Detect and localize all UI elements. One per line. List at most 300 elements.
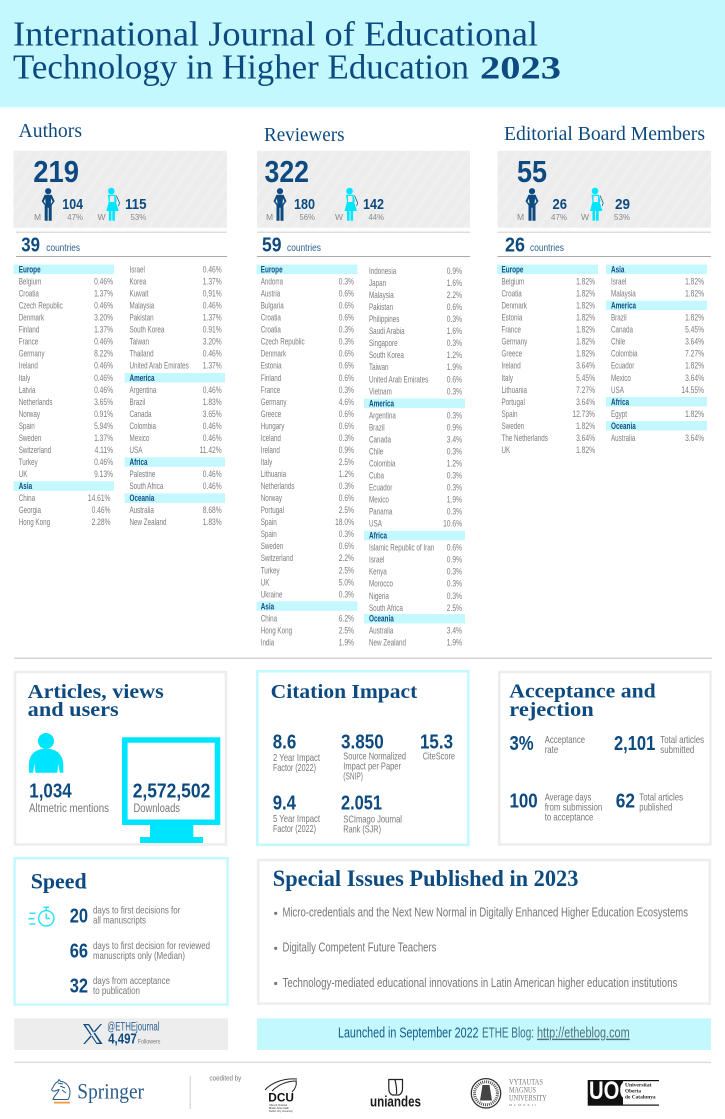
panel: acceptance and rejection: to acceptance (545, 811, 593, 823)
table: editorial board by country: Portugal (502, 397, 525, 407)
panel: citation impact: 2.051 (341, 793, 382, 815)
panel: acceptance and rejection: Acceptance (545, 734, 585, 746)
table: authors by country (14, 264, 225, 527)
table: reviewers by country: 0.6% (339, 409, 354, 419)
panel: citation impact: 5 Year Impact (273, 813, 320, 825)
table: reviewers by country: Morocco (369, 579, 393, 589)
table: authors by country: 0.46% (94, 361, 113, 371)
table: editorial board by country: 1.82% (685, 277, 704, 287)
table: editorial board by country: Brazil (611, 313, 627, 323)
table: reviewers by country: Estonia (261, 361, 282, 371)
table: reviewers by country: Africa (369, 530, 387, 541)
table: editorial board by country: Colombia (611, 349, 638, 359)
panel: X account (14, 1018, 228, 1050)
heading: Reviewers: Reviewers (264, 125, 344, 146)
table: reviewers by country: Asia (261, 601, 275, 612)
table: reviewers by country: UK (261, 577, 269, 588)
logo: Springer: Springer (77, 1078, 145, 1103)
table: authors by country: South Korea (130, 325, 165, 335)
table: authors by country: Norway (19, 409, 40, 419)
panel: acceptance and rejection: submitted (660, 744, 694, 756)
panel: authors totals: 104 (62, 197, 83, 213)
table: editorial board by country: Estonia (502, 313, 523, 323)
table: editorial board by country: 3.64% (685, 373, 704, 383)
table: authors by country: 1.37% (203, 361, 222, 371)
panel: speed: Speed (31, 868, 87, 893)
table: reviewers by country: Croatia (261, 313, 282, 323)
table: reviewers by country: 1.9% (447, 362, 462, 372)
table: editorial board by country: Israel (611, 276, 627, 287)
logo: UOC: Oberta (625, 1088, 641, 1094)
table: reviewers by country: 5.0% (339, 577, 354, 588)
panel: editorial board totals: 47% (551, 212, 567, 222)
panel: citation impact: CiteScore (423, 750, 455, 762)
table: editorial board by country: Spain (502, 409, 518, 419)
panel: editorial board totals: M (517, 212, 524, 222)
title banner: 2023 (480, 50, 561, 86)
table: authors by country: 1.37% (203, 277, 222, 287)
table: editorial board by country: Oceania (611, 421, 636, 431)
reviewers country count (262, 234, 321, 256)
table: reviewers by country: Spain (261, 529, 277, 540)
panel: reviewers totals: 142 (363, 197, 384, 213)
logo: uniandes (370, 1080, 421, 1111)
logo: UOC: de Catalunya (625, 1094, 656, 1100)
icon: woman (590, 188, 603, 221)
table: editorial board by country: 1.82% (576, 445, 595, 455)
authors country count: countries (46, 242, 80, 254)
table: authors by country: 11.42% (200, 445, 222, 455)
table: authors by country: UK (19, 469, 27, 479)
panel: speed: 66 (70, 941, 88, 963)
table: reviewers by country: Denmark (261, 349, 286, 359)
table: editorial board by country: 1.82% (576, 325, 595, 335)
table: reviewers by country: 0.3% (339, 385, 354, 395)
table: authors by country: Hong Kong (19, 517, 50, 527)
table: reviewers by country: 1.6% (447, 326, 462, 336)
table: reviewers by country: Israel (369, 555, 385, 565)
table: reviewers by country: South Africa (369, 603, 403, 613)
table: editorial board by country: Greece (502, 349, 522, 359)
table: authors by country: New Zealand (130, 517, 166, 527)
table: authors by country: Kuwait (130, 289, 149, 299)
table: editorial board by country: 1.82% (576, 277, 595, 287)
table: reviewers by country: China (261, 613, 278, 624)
table: reviewers by country: Kenya (369, 567, 387, 577)
logo: DCU: Ollscoil Chathair (269, 1104, 287, 1107)
panel: citation impact: Rank (SJR) (343, 824, 381, 836)
table: authors by country: 0.46% (203, 265, 222, 275)
table: reviewers by country: Colombia (369, 458, 396, 469)
table: authors by country: 0.46% (94, 457, 113, 467)
title banner: Technology in Higher Education (13, 48, 469, 86)
icon: stopwatch (28, 907, 54, 926)
panel: speed: days to first decision for reviewed (93, 940, 210, 952)
table: reviewers by country: 0.3% (447, 314, 462, 324)
table: editorial board by country: Italy (502, 373, 513, 383)
table: reviewers by country: 0.6% (339, 313, 354, 323)
panel: blog banner: Launched in September 2022 (338, 1026, 478, 1042)
table: authors by country: Israel (130, 264, 145, 275)
table: reviewers by country: Saudi Arabia (369, 326, 405, 337)
panel: speed: 20 (70, 905, 88, 927)
table: reviewers by country: Cuba (369, 470, 385, 481)
table: authors by country: 0.46% (203, 469, 222, 479)
table: reviewers by country: 4.6% (339, 397, 354, 407)
table: reviewers by country: Taiwan (369, 362, 389, 373)
table: editorial board by country: 1.82% (685, 313, 704, 323)
table: reviewers by country: 2.5% (447, 603, 462, 613)
table: reviewers by country: Singapore (369, 338, 398, 349)
table: reviewers by country: 0.9% (447, 266, 462, 276)
table: authors by country: 9.13% (94, 469, 113, 479)
panel: acceptance and rejection: rejection (509, 699, 594, 721)
table: reviewers by country: 2.5% (339, 565, 354, 576)
panel: X account: @ETHEjournal (107, 1021, 160, 1033)
table: reviewers by country: 0.3% (447, 483, 462, 493)
table: editorial board by country: 14.55% (681, 385, 704, 395)
table: editorial board by country: 3.64% (576, 397, 595, 407)
panel: reviewers totals: 56% (300, 212, 315, 222)
table: editorial board by country: Ecuador (611, 361, 635, 371)
table: editorial board by country: 1.82% (576, 421, 595, 431)
panel: articles, views and users: Articles, views (28, 681, 164, 703)
table: reviewers by country: 0.3% (339, 277, 354, 287)
table: reviewers by country: 0.3% (339, 481, 354, 491)
table: authors by country: Ireland (19, 361, 38, 371)
panel: editorial board totals: 29 (615, 197, 630, 213)
table: editorial board by country: Australia (611, 433, 636, 443)
table: authors by country: Turkey (19, 457, 38, 467)
table: editorial board by country: 12.73% (572, 409, 595, 419)
table: authors by country: Sweden (19, 433, 41, 443)
reviewers country count: 59 (262, 234, 282, 256)
table: editorial board by country: Africa (611, 397, 629, 407)
table: authors by country: Korea (130, 276, 147, 287)
table: reviewers by country: 1.9% (447, 495, 462, 505)
table: reviewers by country (256, 264, 465, 648)
table: reviewers by country: 0.6% (339, 301, 354, 311)
table: reviewers by country: Islamic Republic of Iran (369, 543, 434, 553)
table: reviewers by country: 0.3% (447, 411, 462, 421)
table: editorial board by country: 3.64% (576, 361, 595, 371)
table: reviewers by country: 0.6% (339, 493, 354, 503)
table: reviewers by country: Pakistan (369, 302, 393, 312)
table: editorial board by country: Malaysia (611, 289, 636, 299)
table: reviewers by country: Oceania (369, 613, 394, 624)
table: authors by country: Belgium (19, 276, 41, 287)
table: reviewers by country: Sweden (261, 541, 283, 552)
table: reviewers by country: 0.3% (447, 471, 462, 481)
table: editorial board by country: Mexico (611, 373, 631, 383)
table: authors by country: 5.94% (94, 421, 113, 431)
table: reviewers by country: 0.3% (447, 338, 462, 348)
table: authors by country: 0.46% (203, 433, 222, 443)
title banner (0, 0, 725, 108)
icon: person (29, 733, 63, 773)
table: authors by country: Czech Republic (19, 301, 63, 311)
panel: articles, views and users: Downloads (134, 803, 180, 815)
table: reviewers by country: 3.4% (447, 435, 462, 445)
table: authors by country: Pakistan (130, 313, 154, 323)
table: authors by country: 0.46% (94, 277, 113, 287)
table: editorial board by country: France (502, 325, 521, 335)
table: authors by country: 8.68% (203, 505, 222, 515)
table: reviewers by country: 0.9% (447, 423, 462, 433)
table: reviewers by country: Spain (261, 517, 277, 527)
icon: monitor (122, 737, 220, 843)
table: editorial board by country: 3.64% (685, 337, 704, 347)
table: authors by country: 1.83% (203, 397, 222, 407)
table: editorial board by country: 5.45% (576, 373, 595, 383)
table: reviewers by country: Hong Kong (261, 625, 292, 636)
table: authors by country: Netherlands (19, 397, 53, 407)
logo: DCU (265, 1079, 297, 1113)
panel: authors totals (14, 151, 227, 228)
table: reviewers by country: USA (369, 519, 383, 529)
table: authors by country: Europe (19, 264, 41, 275)
table: reviewers by country: 0.3% (447, 567, 462, 577)
panel: citation impact (257, 671, 468, 845)
table: authors by country: 0.46% (203, 421, 222, 431)
panel: authors totals: 53% (130, 212, 147, 222)
table: authors by country: 3.20% (94, 313, 113, 323)
panel: reviewers totals: M (266, 212, 273, 222)
table: authors by country: 0.46% (94, 301, 113, 311)
table: reviewers by country: 2.2% (339, 553, 354, 563)
heading: Authors: Authors (18, 121, 82, 142)
table: authors by country: 0.46% (203, 301, 222, 311)
table: editorial board by country: 5.45% (685, 325, 704, 335)
table: reviewers by country: 2.2% (447, 290, 462, 300)
table: reviewers by country: Ireland (261, 445, 280, 455)
table: reviewers by country: Australia (369, 626, 394, 636)
table: authors by country: Thailand (130, 349, 154, 359)
table: reviewers by country: 0.3% (339, 325, 354, 335)
logo: Vytautas Magnus University: VYTAUTAS (509, 1076, 543, 1086)
panel: speed (15, 858, 228, 1004)
table: editorial board by country: USA (611, 385, 625, 395)
table: editorial board by country: 1.82% (576, 313, 595, 323)
table: reviewers by country: 18.0% (335, 517, 354, 527)
panel: citation impact: 2 Year Impact (273, 752, 320, 764)
table: authors by country: South Africa (130, 481, 164, 491)
table: authors by country: 8.22% (94, 349, 113, 359)
panel: authors totals: W (98, 212, 106, 222)
table: authors by country: 1.37% (94, 325, 113, 335)
table: editorial board by country: Canada (611, 325, 634, 335)
panel: acceptance and rejection: Total articles (660, 734, 704, 746)
table: authors by country: 3.65% (203, 409, 222, 419)
table: editorial board by country: Europe (502, 264, 524, 275)
table: authors by country: 1.37% (94, 289, 113, 299)
table: editorial board by country: Denmark (502, 301, 527, 311)
table: reviewers by country: 0.9% (447, 555, 462, 565)
table: editorial board by country: 1.82% (576, 337, 595, 347)
table: authors by country: Georgia (19, 505, 42, 515)
table: authors by country: China (19, 493, 36, 503)
table: authors by country: Australia (130, 505, 155, 515)
panel: editorial board totals: W (581, 212, 589, 222)
table: reviewers by country: 0.3% (447, 579, 462, 589)
table: authors by country: 0.46% (94, 385, 113, 395)
table: reviewers by country: Norway (261, 493, 282, 503)
table: reviewers by country: Brazil (369, 422, 385, 433)
editorial board country count: countries (530, 242, 564, 254)
table: authors by country: Italy (19, 373, 30, 383)
heading: Editorial Board Members: Editorial Board Members (504, 124, 705, 145)
table: reviewers by country: 1.6% (447, 278, 462, 288)
table: reviewers by country: 0.3% (447, 447, 462, 457)
table: reviewers by country: Malaysia (369, 290, 394, 300)
panel: acceptance and rejection: 62 (616, 791, 635, 813)
panel: citation impact: 8.6 (273, 731, 296, 753)
table: reviewers by country: United Arab Emirates (369, 374, 428, 385)
table: editorial board by country: 1.82% (685, 289, 704, 299)
panel: acceptance and rejection: 2,101 (614, 733, 655, 755)
table: authors by country: United Arab Emirates (130, 361, 189, 371)
icon: man (274, 188, 286, 221)
panel: articles, views and users: 1,034 (29, 781, 72, 803)
table: authors by country: Africa (130, 457, 148, 467)
logo: Vytautas Magnus University (471, 1076, 547, 1108)
table: reviewers by country: 10.6% (443, 519, 462, 529)
table: reviewers by country: America (369, 398, 394, 409)
table: editorial board by country: Ireland (502, 361, 521, 371)
panel: acceptance and rejection: Total articles (639, 791, 683, 803)
panel: citation impact: 15.3 (420, 731, 453, 753)
table: reviewers by country: 0.3% (447, 507, 462, 517)
table: reviewers by country: 0.3% (339, 433, 354, 443)
table: editorial board by country: 3.64% (685, 433, 704, 443)
table: reviewers by country: 0.6% (447, 374, 462, 385)
table: reviewers by country: 2.5% (339, 626, 354, 636)
panel: acceptance and rejection: 100 (510, 791, 538, 813)
table: editorial board by country: Belgium (502, 276, 524, 287)
table: reviewers by country: 0.6% (339, 349, 354, 359)
table: reviewers by country: 1.2% (339, 469, 354, 479)
table: reviewers by country: 0.6% (339, 361, 354, 371)
logo: Vytautas Magnus University: MCMXXII (509, 1103, 537, 1107)
table: reviewers by country: 1.9% (339, 638, 354, 648)
table: reviewers by country: Vietnam (369, 386, 392, 397)
table: editorial board by country: Germany (502, 337, 527, 347)
panel: speed: 32 (70, 975, 88, 997)
table: reviewers by country: Netherlands (261, 481, 295, 491)
panel: citation impact: Factor (2022) (273, 762, 316, 774)
table: authors by country: 0.91% (203, 325, 222, 335)
table: reviewers by country: 2.5% (339, 457, 354, 467)
table: authors by country: 1.37% (94, 433, 113, 443)
table: reviewers by country: 0.6% (447, 302, 462, 312)
panel: citation impact: Impact per Paper (343, 760, 401, 772)
table: authors by country: 3.20% (203, 337, 222, 347)
table: authors by country: Croatia (19, 289, 40, 299)
table: authors by country: 0.91% (94, 409, 113, 419)
table: reviewers by country: Panama (369, 507, 393, 517)
panel: special issues: Special Issues Published in 2023 (273, 866, 578, 892)
logo: Vytautas Magnus University: MAGNUS (509, 1085, 536, 1095)
table: reviewers by country: Finland (261, 373, 281, 383)
table: reviewers by country: 0.9% (339, 445, 354, 455)
panel: editorial board totals: 53% (614, 212, 630, 222)
table: editorial board by country: 1.82% (685, 361, 704, 371)
panel: speed: days to first decisions for (93, 904, 181, 916)
table: reviewers by country: Mexico (369, 494, 389, 505)
table: reviewers by country: Croatia (261, 325, 282, 335)
table: reviewers by country: Argentina (369, 410, 396, 421)
icon: X logo (83, 1024, 103, 1044)
table: editorial board by country: Croatia (502, 289, 522, 299)
panel: reviewers totals: 180 (294, 197, 315, 213)
icon: man (526, 188, 538, 221)
table: reviewers by country: Ukraine (261, 589, 282, 600)
panel: editorial board totals (498, 151, 711, 228)
table: reviewers by country: New Zealand (369, 638, 406, 648)
panel: authors totals: 219 (33, 154, 79, 189)
logo: UOC: Universitat (625, 1083, 652, 1089)
table: authors by country: Argentina (130, 385, 157, 395)
table: reviewers by country: 3.4% (447, 626, 462, 636)
logo: DCU: Bhaile Átha Cliath (269, 1107, 289, 1110)
table: authors by country: 2.28% (92, 517, 111, 527)
panel: reviewers totals: 322 (264, 154, 309, 189)
table: authors by country: Oceania (130, 493, 155, 503)
table: authors by country: 0.46% (203, 349, 222, 359)
table: authors by country: America (130, 373, 155, 383)
table: reviewers by country: 1.2% (447, 350, 462, 360)
panel: citation impact: Citation Impact (271, 681, 417, 703)
panel: editorial board totals: 55 (517, 154, 547, 189)
panel: reviewers totals (257, 151, 470, 228)
logo: Vytautas Magnus University: UNIVERSITY (509, 1092, 547, 1102)
panel: authors totals: 115 (125, 197, 146, 213)
logo: uniandes: uniandes (370, 1095, 421, 1111)
table: reviewers by country: Hungary (261, 421, 285, 431)
table: reviewers by country: Chile (369, 446, 383, 457)
table: authors by country: Malaysia (130, 301, 155, 311)
table: editorial board by country: Lithuania (502, 385, 528, 395)
table: reviewers by country: Ecuador (369, 482, 393, 493)
table: authors by country: 3.65% (94, 397, 113, 407)
table: reviewers by country: 0.6% (339, 289, 354, 299)
table: reviewers by country: 2.5% (339, 505, 354, 515)
panel: acceptance and rejection: Average days (545, 791, 591, 803)
table: reviewers by country: Iceland (261, 433, 281, 443)
table: reviewers by country: Europe (261, 264, 283, 275)
table: authors by country: Taiwan (130, 337, 149, 347)
table: authors by country: 0.46% (92, 505, 111, 515)
table: editorial board by country: The Netherlands (502, 433, 548, 443)
table: reviewers by country: France (261, 385, 280, 395)
panel: acceptance and rejection: rate (545, 744, 558, 756)
table: authors by country: 1.83% (203, 517, 222, 527)
panel: citation impact: Factor (2022) (273, 823, 316, 835)
table: editorial board by country: America (611, 300, 636, 311)
table: reviewers by country: 1.9% (447, 638, 462, 648)
table: editorial board by country: Asia (611, 264, 625, 275)
table: reviewers by country: 1.2% (447, 459, 462, 469)
table: authors by country: 0.46% (94, 337, 113, 347)
table: reviewers by country: 0.6% (447, 543, 462, 553)
panel: acceptance and rejection (499, 672, 710, 844)
panel: acceptance and rejection: from submission (545, 801, 602, 813)
table: authors by country: 0.46% (94, 373, 113, 383)
table: reviewers by country: Turkey (261, 565, 280, 576)
table: editorial board by country: Chile (611, 337, 625, 347)
panel: acceptance and rejection: published (639, 801, 672, 813)
table: reviewers by country: Austria (261, 289, 281, 299)
